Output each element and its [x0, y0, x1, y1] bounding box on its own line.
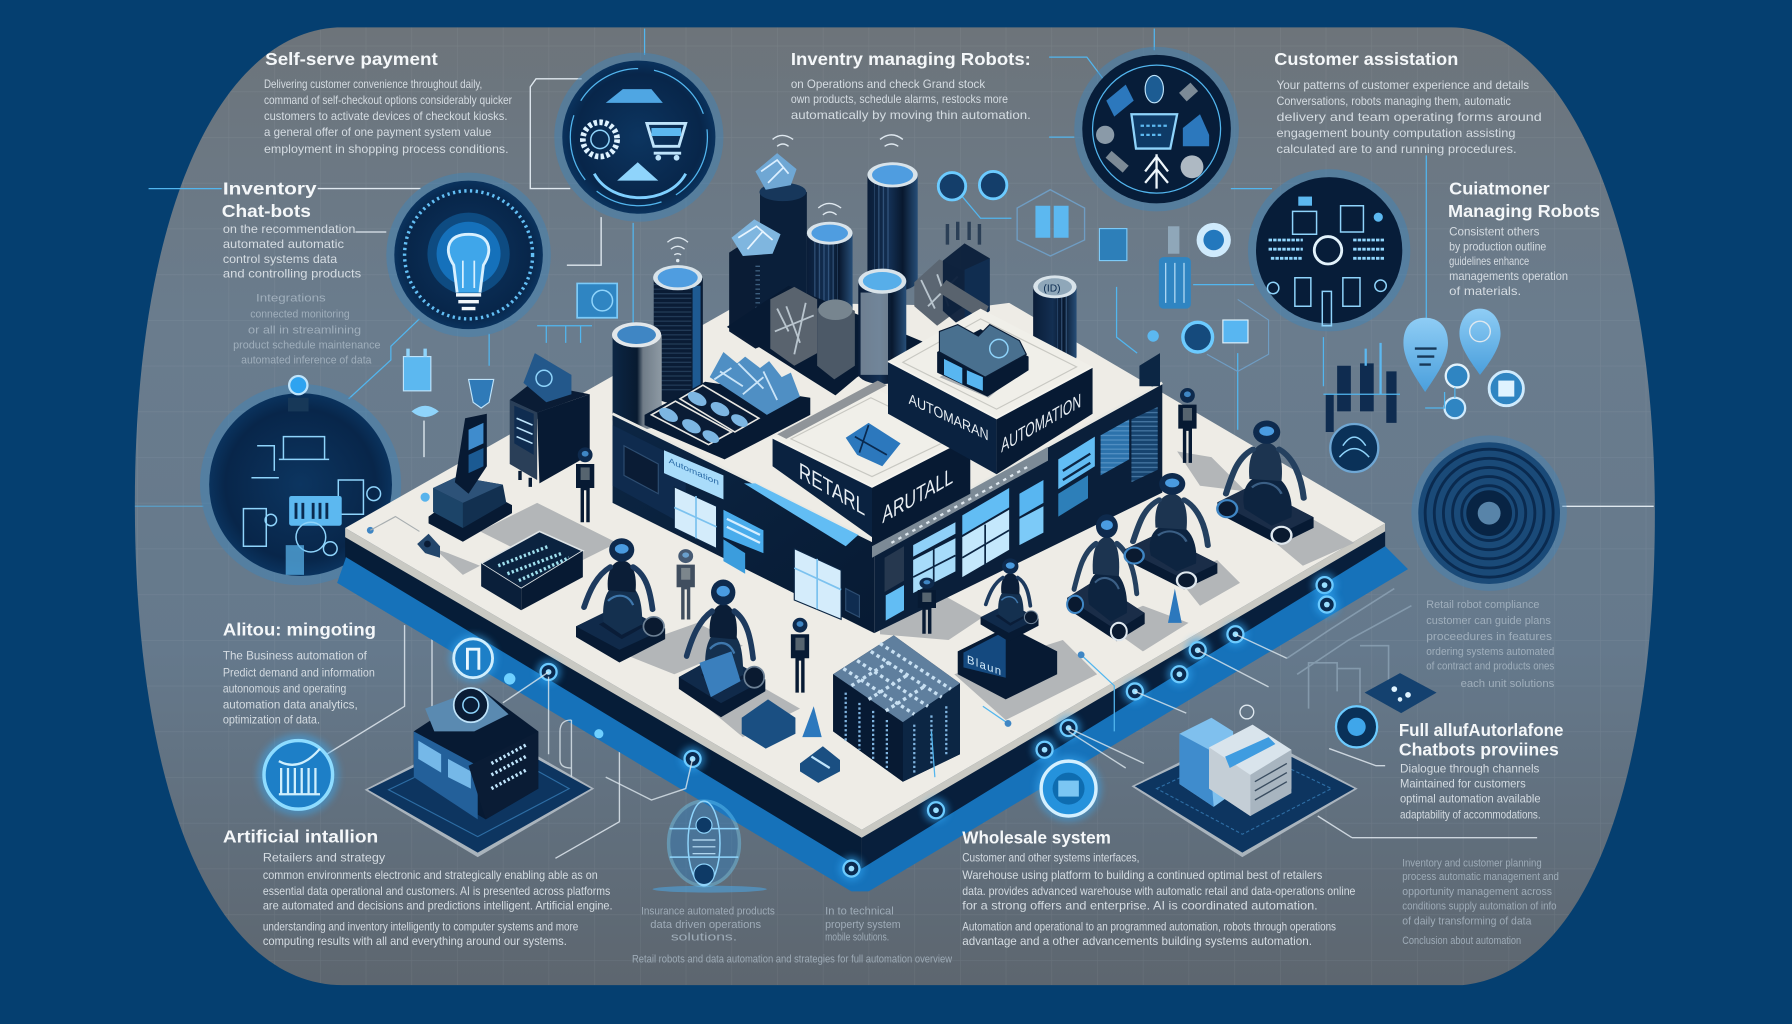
text block right middle: customer can guide plans [1426, 615, 1551, 627]
heading and text: artificial intelligence: common environments electronic and strategically enabling able as on [263, 868, 598, 882]
heading and text: self-serve payment: command of self-checkout options considerably quicker [264, 93, 512, 107]
heading and text: monitoring: optimization of data. [223, 712, 320, 726]
heading and text: monitoring: autonomous and operating [223, 682, 346, 696]
small centered captions: Insurance automated products [641, 905, 775, 917]
translucent pipes at lower right [1287, 589, 1411, 709]
text block right middle [1426, 599, 1555, 690]
small icons: top cluster [403, 171, 1269, 457]
heading and text: wholesale system: Wholesale system [962, 827, 1111, 847]
icon: n circle [449, 634, 497, 682]
heading and text: wholesale system: Automation and operational to an programmed automation, robots through operations [962, 919, 1336, 933]
automation block: AUTOMATION [1001, 390, 1081, 457]
gift boxes with pad [1131, 718, 1358, 857]
heading and text: customer managing robots: of materials. [1449, 284, 1521, 298]
heading and text: full automation chatbots [1399, 720, 1564, 821]
retail block: ARUTALL [882, 463, 953, 529]
heading and text: full automation chatbots: Full allufAutorlafone [1399, 720, 1564, 740]
solar trays on roof [645, 352, 810, 459]
faint text block lower right [1402, 857, 1559, 947]
circle: retail icon board [200, 376, 401, 585]
heading and text: monitoring: Alitou: mingoting [223, 619, 376, 639]
small centered captions: In to technical [825, 905, 894, 917]
heading and text: self-serve payment [264, 49, 512, 156]
icon: coin circle right [1336, 706, 1377, 747]
small centered captions: data driven operations [650, 919, 761, 931]
heading and text: wholesale system: advantage and a other advancements building systems automation. [962, 934, 1312, 948]
heading and text: self-serve payment: employment in shopping process conditions. [264, 142, 509, 156]
small centered captions: Retail robots and data automation and strategies for full automation overview [632, 953, 953, 965]
heading and text: artificial intelligence: essential data operational and customers. AI is presented across platforms [263, 884, 610, 898]
wifi icons over towers [667, 135, 903, 262]
heading and text: customer managing robots [1448, 178, 1600, 298]
heading and text: wholesale system: Warehouse using platform to building a continued optimal best of retailers [962, 868, 1322, 882]
automation block: AUTOMARAN [909, 391, 989, 445]
faint text block lower right: opportunity management across [1402, 886, 1552, 898]
text block right middle: ordering systems automated [1426, 646, 1554, 658]
heading and text: inventory managing robots: automatically by moving thin automation. [791, 108, 1031, 122]
text block right middle: each unit solutions [1461, 678, 1555, 690]
circle: top right icons [1074, 47, 1239, 211]
heading and text: self-serve payment: a general offer of one payment system value [264, 125, 492, 139]
heading and text: artificial intelligence [223, 826, 613, 948]
heading and text: monitoring: The Business automation of [223, 648, 367, 662]
platform edge glowing nodes [503, 573, 1339, 881]
tower group: back towers [727, 153, 1077, 395]
floor: package stack [742, 635, 960, 783]
circle: gear and cart [554, 53, 723, 222]
faint text block lower right: Conclusion about automation [1402, 935, 1521, 947]
heading and text: customer managing robots: Consistent others [1449, 224, 1539, 238]
server cube with pad [365, 688, 594, 857]
heading and text: inventory managing robots: own products, schedule alarms, restocks more [791, 92, 1008, 106]
text block right middle: of contract and products ones [1426, 661, 1555, 673]
heading and text: wholesale system: Customer and other systems interfaces, [962, 851, 1139, 865]
floor: tray crate [417, 531, 583, 610]
heading and text: customer managing robots: by production outline [1449, 239, 1547, 253]
heading and text: inventory chat-bots: control systems data [223, 252, 337, 266]
heading and text: monitoring: Predict demand and information [223, 666, 375, 680]
diamond chip icon [1365, 673, 1437, 713]
small centered captions: mobile solutions. [825, 932, 889, 944]
floor: left kiosks [367, 353, 590, 542]
circle: fingerprint [1411, 435, 1567, 591]
heading and text: inventory chat-bots: on the recommendation [223, 222, 355, 236]
heading and text: inventory chat-bots: Inventory [223, 178, 317, 198]
heading and text: inventory chat-bots: and controlling products [223, 267, 361, 281]
faint text block left: connected monitoring [250, 309, 350, 321]
heading and text: wholesale system: data. provides advanced warehouse with automatic retail and data-operations online [962, 884, 1356, 898]
platform top surface [345, 303, 1385, 830]
heading and text: customer assistation: Your patterns of customer experience and details [1277, 78, 1529, 92]
faint text block lower right: conditions supply automation of info [1402, 901, 1557, 913]
heading and text: self-serve payment: Self-serve payment [265, 49, 438, 69]
heading and text: artificial intelligence: computing results with all and everything around our systems. [263, 934, 567, 948]
faint text block lower right: Inventory and customer planning [1402, 857, 1542, 869]
main building walls [613, 383, 1162, 633]
small centered captions: property system [825, 919, 901, 931]
heading and text: inventory managing robots [791, 49, 1031, 122]
heading and text: inventory chat-bots [222, 178, 361, 281]
faint text block left: Integrations [256, 293, 326, 305]
heading and text: customer assistation: delivery and team operating forms around [1277, 110, 1542, 124]
heading and text: artificial intelligence: Retailers and strategy [263, 851, 385, 865]
circle: right icons [1248, 169, 1410, 331]
floor: robots and people: Blaun [967, 652, 1001, 678]
heading and text: customer managing robots: guidelines enhance [1449, 254, 1529, 268]
faint text block left [233, 293, 381, 366]
heading and text: wholesale system: for a strong offers and enterprise. AI is coordinated automation. [962, 899, 1318, 913]
panel: rounded main background [134, 27, 1655, 986]
heading and text: inventory managing robots: on Operations and check Grand stock [791, 77, 986, 91]
storefront right wall windows [872, 407, 1158, 621]
heading and text: monitoring: automation data analytics, [223, 698, 358, 712]
heading and text: customer assistation: Conversations, robots managing them, automatic [1277, 94, 1511, 108]
connector lines [135, 29, 1654, 858]
map pins and small right icons [1403, 309, 1523, 418]
heading and text: artificial intelligence: are automated and decisions and predictions intelligent. Artificial engine. [263, 899, 613, 913]
tower group: back towers: (ID) [1043, 283, 1061, 294]
floor: robots and people [576, 388, 1314, 717]
heading and text: customer assistation: Customer assistation [1274, 49, 1458, 69]
platform base sides [345, 523, 1385, 869]
small centered captions [632, 905, 953, 965]
heading and text: inventory chat-bots: automated automatic [223, 237, 344, 251]
heading and text: full automation chatbots: Dialogue through channels [1400, 762, 1539, 776]
heading and text: self-serve payment: customers to activate devices of checkout kiosks. [264, 109, 507, 123]
faint text block lower right: process automatic management and [1402, 871, 1559, 883]
icon: globe robot [653, 801, 767, 893]
faint text block left: automated inference of data [241, 354, 372, 366]
faint text block left: product schedule maintenance [233, 340, 381, 352]
heading and text: customer assistation [1274, 49, 1542, 156]
circle: light bulb [386, 173, 551, 337]
heading and text: inventory managing robots: Inventry managing Robots: [791, 49, 1031, 69]
heading and text: self-serve payment: Delivering customer convenience throughout daily, [264, 77, 482, 91]
text block right middle: proceedures in features [1426, 631, 1552, 643]
heading and text: artificial intelligence: Artificial intallion [223, 826, 378, 846]
heading and text: monitoring [223, 619, 376, 726]
retail block [773, 381, 970, 546]
robot arm cluster [1323, 343, 1400, 472]
heading and text: customer managing robots: Cuiatmoner [1449, 178, 1550, 198]
faint text block lower right: of daily transforming of data [1402, 916, 1532, 928]
text block right middle: Retail robot compliance [1426, 599, 1539, 611]
heading and text: customer managing robots: Managing Robots [1448, 201, 1600, 221]
heading and text: customer managing robots: managements operation [1449, 269, 1568, 283]
faint text block left: or all in streamlining [248, 325, 361, 337]
heading and text: inventory chat-bots: Chat-bots [222, 201, 311, 221]
heading and text: wholesale system [962, 827, 1356, 948]
icon: basket circle [1035, 755, 1102, 822]
heading and text: customer assistation: calculated are to and running procedures. [1277, 142, 1517, 156]
icon: chart circle [257, 734, 339, 816]
heading and text: full automation chatbots: adaptability of accommodations. [1400, 807, 1541, 821]
heading and text: artificial intelligence: understanding and inventory intelligently to computer systems and more [263, 919, 579, 933]
tower group: front towers [612, 265, 703, 430]
heading and text: customer assistation: engagement bounty computation assisting [1277, 126, 1515, 140]
automation block [888, 309, 1093, 474]
heading and text: full automation chatbots: optimal automation available [1400, 791, 1541, 805]
storefront left wall windows [664, 450, 859, 619]
heading and text: full automation chatbots: Chatbots proviines [1399, 739, 1559, 759]
small centered captions: solutions. [671, 932, 737, 944]
heading and text: full automation chatbots: Maintained for customers [1400, 776, 1526, 790]
platform underglow [337, 546, 1408, 891]
retail block: RETARL [799, 458, 865, 522]
storefront left wall windows: Automation [669, 455, 719, 487]
floor shadows [434, 451, 1354, 737]
